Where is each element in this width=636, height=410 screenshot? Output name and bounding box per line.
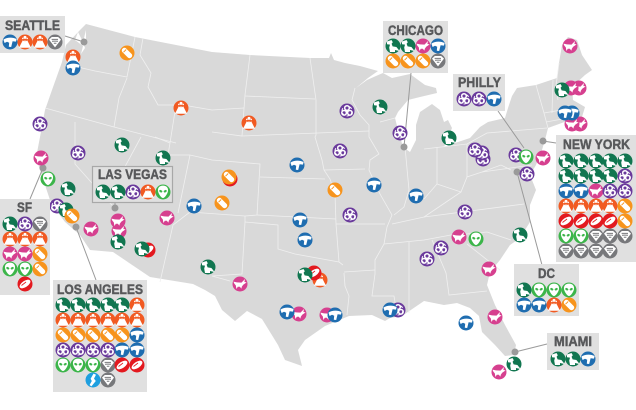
panel: Philly (453, 74, 505, 111)
panel: Miami (547, 333, 599, 370)
panel: DC (514, 264, 579, 316)
leader lines (30, 36, 556, 355)
panel: Las Vegas: LAS VEGAS (98, 167, 167, 182)
panel: Chicago: CHICAGO (388, 23, 443, 38)
panel: Miami: MIAMI (554, 334, 592, 349)
panel: Las Vegas (92, 166, 172, 202)
map: United States landmass (36, 24, 592, 366)
panel: SF (0, 199, 50, 295)
panel: New York (556, 135, 636, 262)
panel: SF: SF (17, 200, 32, 215)
panel: Philly: PHILLY (458, 75, 501, 90)
panel: DC: DC (538, 266, 555, 281)
panel: New York: NEW YORK (563, 137, 630, 152)
panel: Chicago (383, 21, 448, 73)
panel: Seattle: SEATTLE (5, 18, 60, 33)
panel: Los Angeles: LOS ANGELES (57, 282, 143, 297)
panel: Los Angeles (53, 280, 147, 392)
panel: Seattle (0, 16, 65, 53)
map markers (32, 38, 588, 380)
